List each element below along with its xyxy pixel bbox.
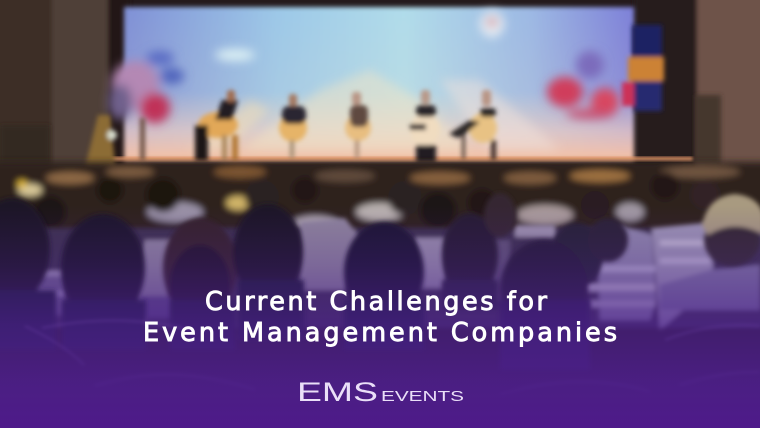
stage screen: [124, 7, 634, 162]
back rows of audience: [0, 162, 760, 234]
logo: EMS Events: EVENTS: [381, 389, 464, 405]
stage floor: [108, 157, 693, 161]
title: [143, 287, 617, 348]
foreground audience heads: [0, 193, 760, 395]
lavender audience seats: [0, 218, 760, 330]
title: Current Challenges for: [205, 287, 548, 317]
right side banner: [622, 25, 664, 111]
panel speakers on stage: [0, 90, 721, 172]
logo: EMS Events: [297, 377, 464, 407]
logo: EMS Events: EMS: [297, 377, 378, 407]
screen graphics left and right: [108, 11, 619, 123]
title: Event Management Companies: [143, 318, 617, 348]
foreground seat backs: [25, 320, 760, 395]
